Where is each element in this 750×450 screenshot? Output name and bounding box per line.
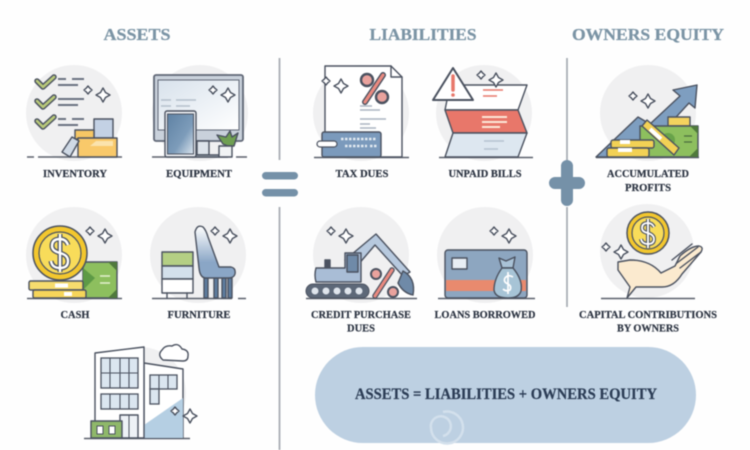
icon: plus sign xyxy=(549,160,585,206)
watermark swirl xyxy=(431,411,463,443)
icon: percent xyxy=(371,269,398,297)
icon: folded bill xyxy=(445,85,527,157)
icon: dollar coin xyxy=(33,226,87,280)
icon: monitor xyxy=(154,75,243,157)
icon: boxes xyxy=(62,119,117,157)
panel: accumulated profits xyxy=(596,65,699,161)
heading: owners equity: OWNERS EQUITY xyxy=(572,25,724,44)
icon: drawer chest xyxy=(162,252,193,298)
label: capital contributions xyxy=(579,310,717,334)
panel: tax dues xyxy=(313,65,409,161)
icon: money bag xyxy=(494,257,521,298)
panel: furniture xyxy=(150,207,246,303)
icon: plant xyxy=(217,131,238,157)
icon: warning triangle xyxy=(433,68,473,100)
icon: coin stack xyxy=(29,281,86,298)
panel: inventory xyxy=(26,65,122,161)
icon: document xyxy=(325,66,402,157)
label: capital contributions: BY OWNERS xyxy=(617,324,679,334)
heading: liabilities: LIABILITIES xyxy=(370,25,476,44)
label: furniture: FURNITURE xyxy=(168,310,230,321)
heading: assets: ASSETS xyxy=(104,25,170,44)
label: accumulated profits: PROFITS xyxy=(625,183,671,194)
icon: banknote xyxy=(83,262,117,298)
label: tax dues: TAX DUES xyxy=(336,169,389,180)
icon: credit card with clip xyxy=(317,132,381,157)
label: equipment: EQUIPMENT xyxy=(166,169,232,180)
label: inventory: INVENTORY xyxy=(43,169,107,180)
panel: unpaid bills xyxy=(433,65,533,161)
icon: tablet xyxy=(165,111,196,157)
panel: credit purchase dues xyxy=(306,207,417,303)
label: accumulated profits: ACCUMULATED xyxy=(607,169,689,180)
icon: dollar coin xyxy=(627,212,669,254)
icon: bank card xyxy=(445,250,527,298)
label: credit purchase dues: DUES xyxy=(347,324,375,334)
icon: excavator xyxy=(306,234,414,298)
formula pill xyxy=(315,347,696,443)
icon: checklist xyxy=(37,77,84,127)
label: credit purchase dues: CREDIT PURCHASE xyxy=(311,310,411,321)
divider right xyxy=(566,58,568,307)
panel: equipment xyxy=(152,65,248,161)
label: capital contributions: CAPITAL CONTRIBUTIONS xyxy=(579,310,717,321)
panel: capital contributions xyxy=(600,204,702,298)
icon: cloud xyxy=(160,345,188,361)
panel: building xyxy=(84,345,197,439)
icon: rising arrow xyxy=(596,85,697,157)
label: accumulated profits xyxy=(607,169,689,194)
icon: coins xyxy=(607,120,679,157)
icon: percent xyxy=(361,74,388,103)
icon: equals sign xyxy=(262,172,298,196)
formula text: ASSETS = LIABILITIES + OWNERS EQUITY xyxy=(355,386,657,403)
icon: chair xyxy=(195,226,235,298)
label: loans borrowed: LOANS BORROWED xyxy=(434,310,536,321)
icon: open hand xyxy=(618,244,702,298)
label: unpaid bills: UNPAID BILLS xyxy=(448,169,522,180)
panel: loans borrowed xyxy=(437,207,535,303)
icon: banknote xyxy=(640,117,698,157)
divider left xyxy=(278,58,280,450)
icon: office block xyxy=(91,347,183,438)
label: credit purchase dues xyxy=(311,310,411,334)
panel: cash xyxy=(26,207,122,303)
label: cash: CASH xyxy=(60,310,90,321)
